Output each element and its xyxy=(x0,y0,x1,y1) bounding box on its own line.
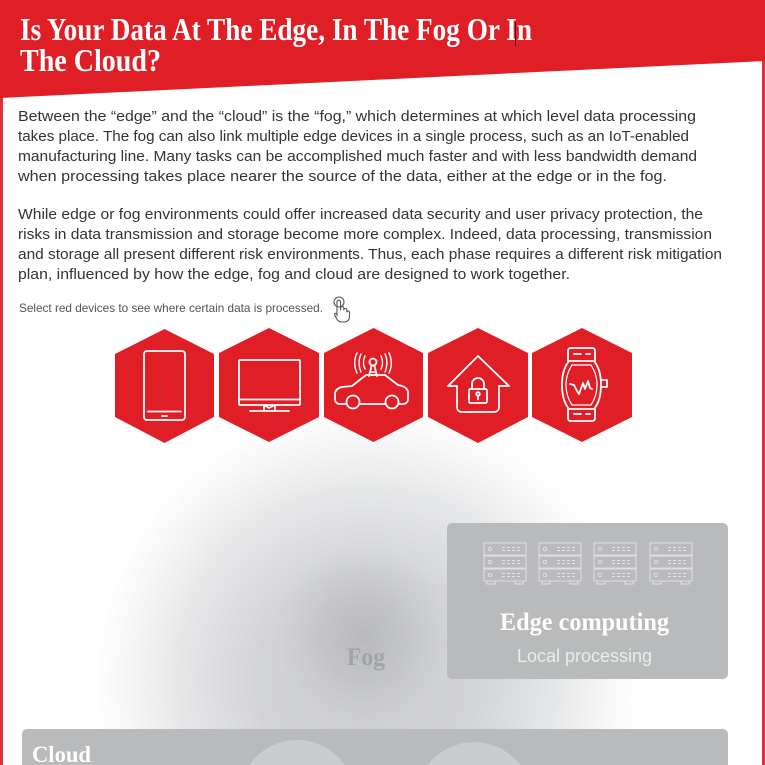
fog glow xyxy=(90,400,645,730)
panel: cloud xyxy=(22,729,728,765)
risk paragraph: plan, influenced by how the edge, fog and cloud are designed to work together. xyxy=(18,267,570,283)
icon: server racks xyxy=(484,543,692,584)
intro paragraph: takes place. The fog can also link multiple edge devices in a single process, such as an IoT-enabled xyxy=(18,129,689,145)
hexagon: smartwatch xyxy=(532,328,632,442)
risk paragraph: and storage all present different risk environments. Thus, each phase requires a different risk mitigation xyxy=(18,247,722,263)
intro paragraph xyxy=(17,109,697,185)
title: Is Your Data At The Edge, In The Fog Or In xyxy=(20,11,532,47)
edge computing heading: Edge computing xyxy=(500,609,669,636)
icon: pointing hand xyxy=(334,297,350,322)
header banner xyxy=(0,0,765,98)
edge computing subtitle: Local processing xyxy=(517,646,652,666)
title xyxy=(20,11,532,78)
hexagon: secure home xyxy=(428,328,528,443)
panel: edge computing xyxy=(447,523,728,679)
cloud circle left xyxy=(249,740,345,765)
title: The Cloud? xyxy=(20,42,161,78)
risk paragraph xyxy=(18,207,722,283)
fog label: Fog xyxy=(347,644,385,671)
device hexagons xyxy=(115,328,632,443)
hexagon: smartphone xyxy=(115,329,214,443)
hexagon: connected car xyxy=(324,328,423,442)
intro paragraph: Between the “edge” and the “cloud” is the “fog,” which determines at which level data processing xyxy=(18,109,696,125)
risk paragraph: risks in data transmission and storage become more complex. Indeed, data processing, transmission xyxy=(18,227,712,243)
hexagon: television xyxy=(219,328,319,442)
intro paragraph: when processing takes place nearer the source of the data, either at the edge or in the fog. xyxy=(17,169,667,185)
instruction text: Select red devices to see where certain data is processed. xyxy=(19,302,323,315)
cloud circle right xyxy=(428,742,520,765)
risk paragraph: While edge or fog environments could offer increased data security and user privacy protection, the xyxy=(18,207,703,223)
intro paragraph: manufacturing line. Many tasks can be accomplished much faster and with less bandwidth demand xyxy=(18,149,697,165)
